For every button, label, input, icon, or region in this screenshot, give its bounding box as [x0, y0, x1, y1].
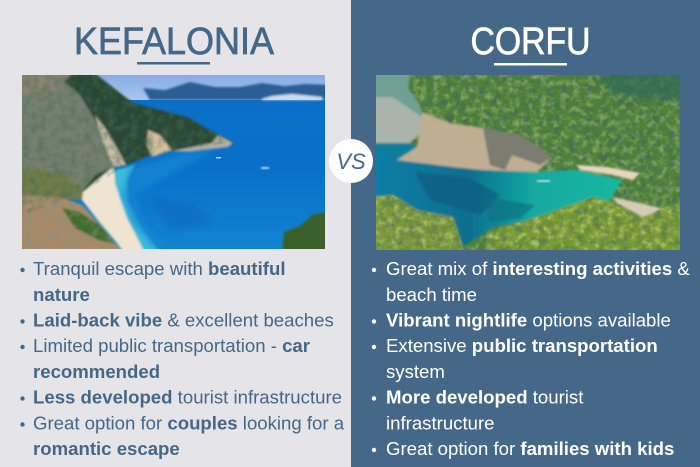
list: Kefalonia highlights: Great option for couples looking for a [33, 412, 345, 434]
list: Corfu highlights: Great mix of interesting activities & [386, 258, 690, 279]
list: Corfu highlights: infrastructure [386, 412, 495, 434]
panel: Corfu background [351, 0, 700, 467]
list: Kefalonia highlights [20, 258, 345, 459]
list: Corfu highlights: Great option for families with kids [386, 438, 674, 459]
vs badge: VS [336, 149, 366, 174]
list: Corfu highlights: Vibrant nightlife options available [386, 310, 671, 330]
list: Corfu highlights: system [386, 361, 445, 382]
list: Corfu highlights: Extensive public transportation [386, 335, 658, 356]
list: Corfu highlights: beach time [386, 284, 477, 305]
list: Corfu highlights: More developed tourist [386, 386, 584, 408]
list: Kefalonia highlights: Tranquil escape with beautiful [33, 258, 286, 279]
list: Kefalonia highlights: Limited public transportation - car [33, 335, 310, 356]
list: Kefalonia highlights: romantic escape [33, 438, 180, 459]
list: Kefalonia highlights: nature [33, 284, 90, 305]
photo: Kefalonia beach [22, 75, 325, 249]
list: Corfu highlights [372, 258, 690, 459]
heading: Kefalonia: KEFALONIA [74, 21, 275, 63]
panel: Kefalonia background [0, 0, 351, 467]
photo: Corfu bay [376, 75, 680, 250]
list: Kefalonia highlights: Laid-back vibe & excellent beaches [33, 310, 334, 330]
list: Kefalonia highlights: recommended [33, 361, 160, 382]
vs badge [329, 139, 373, 183]
list: Kefalonia highlights: Less developed tourist infrastructure [33, 386, 342, 408]
heading: Corfu: CORFU [470, 21, 590, 63]
